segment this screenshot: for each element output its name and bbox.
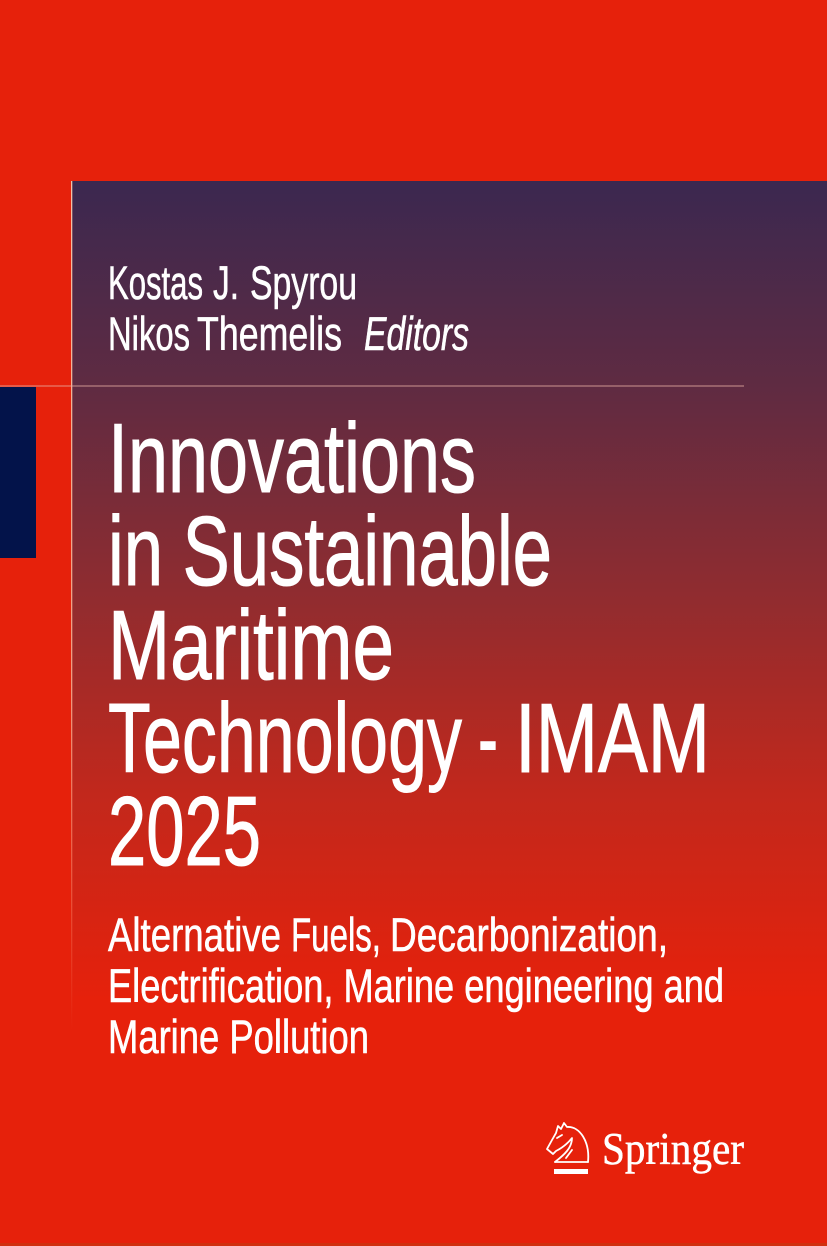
subtitle [108, 908, 724, 1063]
editor name: Kostas J. Spyrou [108, 256, 357, 309]
editor name: Kostas J. Spyrou: Kostas [108, 256, 203, 309]
title: Technology [108, 683, 462, 793]
wordmark: Springer [602, 1124, 744, 1174]
editor name: Nikos Themelis: Nikos [108, 307, 190, 360]
title: Maritime [108, 590, 394, 700]
title: 2025 [108, 776, 261, 886]
icon: chess knight [547, 1123, 588, 1174]
title: Innovations [108, 403, 476, 513]
editors [108, 256, 469, 360]
vertical rule [71, 181, 72, 1030]
gradient panel [72, 181, 827, 1000]
subtitle: Decarbonization, [390, 908, 668, 961]
editor name: Nikos Themelis: Themelis [197, 307, 342, 360]
subtitle: Fuels, [291, 908, 381, 961]
title [108, 403, 710, 886]
editors label: Editors [364, 307, 469, 360]
title: IMAM [515, 683, 710, 793]
editor name: Kostas J. Spyrou: J. [213, 256, 239, 309]
editor name: Nikos Themelis [108, 307, 342, 360]
horizontal rule [0, 386, 744, 387]
bottom edge strip [0, 1243, 827, 1246]
editor name: Kostas J. Spyrou: Spyrou [250, 256, 357, 309]
navy spine tab [0, 387, 36, 558]
title: in Sustainable [108, 496, 552, 606]
title: - [478, 683, 498, 793]
subtitle: Marine Pollution [108, 1010, 369, 1063]
subtitle: Alternative [108, 908, 281, 961]
springer logo [547, 1123, 744, 1174]
